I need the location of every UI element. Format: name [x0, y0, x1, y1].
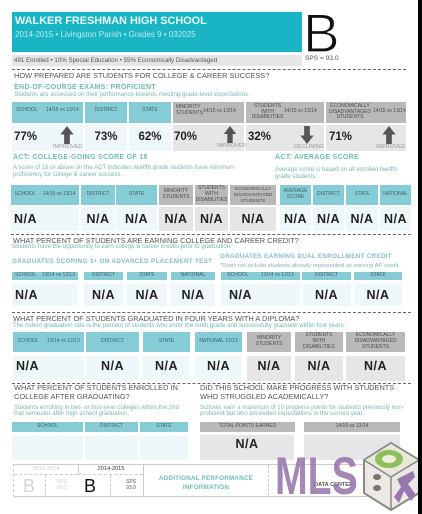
value: dual state [354, 283, 402, 306]
value: district [86, 356, 139, 381]
enrollment band: 491 Enrolled • 10% Special Education • 55% Economically Disadvantaged [14, 57, 217, 64]
value: national [195, 356, 242, 381]
text: graduation description: The cohort graduation rate is the percent of students who enter the ninth grade and successfully graduate within four years. [13, 322, 345, 329]
header: state [143, 332, 190, 352]
header: total points: TOTAL POINTS EARNED [219, 423, 276, 429]
section heading: college enrollment: COLLEGE AFTER GRADUATING? [14, 392, 130, 400]
value: minority [247, 356, 291, 381]
current SPS [110, 475, 143, 496]
value: dual state: N/A [366, 288, 390, 302]
header: economic: DISADVANTAGED [354, 338, 397, 344]
table: progress points [200, 422, 400, 460]
header: disabilities [295, 332, 343, 352]
value: AP district [84, 283, 123, 306]
header: school [11, 185, 79, 205]
text: enrollment description [14, 404, 179, 417]
current grade: B [84, 476, 96, 496]
header: economic: STUDENTS [337, 114, 363, 120]
section heading: progress: DID THIS SCHOOL MAKE PROGRESS WITH STUDENTS [200, 383, 394, 392]
value: total points: N/A [235, 437, 259, 451]
value: average [280, 207, 311, 231]
heading: AP: GRADUATES SCORING 3+ ON ADVANCED PLACEMENT TEST [12, 258, 212, 265]
header: minority [173, 102, 244, 123]
text: ACT college-going description [13, 164, 234, 178]
header: disabilities [246, 102, 324, 123]
value: national: N/A [207, 359, 230, 373]
header: AP district [84, 272, 123, 280]
header: disabilities: WITH [261, 109, 274, 115]
value: minority: 70% [174, 131, 197, 143]
label: disabilities comparison: 14/15 vs 13/14 [284, 108, 317, 114]
value: disabilities [246, 125, 324, 151]
watermark: cube [362, 442, 418, 511]
value: minority [159, 207, 193, 231]
value: state [143, 356, 190, 381]
text: enrollment description: Students enrolling in two- or four-year colleges within the 2nd [14, 404, 179, 411]
label: economic comparison: 14/15 vs 13/14 [373, 108, 406, 114]
header: AP district: DISTRICT [92, 272, 115, 278]
current SPS: 93.0 [126, 485, 136, 491]
header: state: STATE [156, 423, 172, 429]
table: college enrollment [12, 422, 188, 460]
header: dual school: SCHOOL [227, 272, 248, 278]
value: district avg: N/A [317, 212, 340, 226]
text: ACT college-going description: proficiency for college & career success. [13, 170, 122, 178]
header: minority: STUDENTS [176, 110, 203, 116]
value: dual school [221, 283, 300, 306]
header: school [13, 332, 84, 352]
header: comparison [304, 422, 400, 432]
header: minority: MINORITY [164, 188, 188, 194]
value: total points [200, 435, 294, 460]
header: state: STATE [159, 338, 174, 344]
value: dual school: N/A [229, 288, 252, 302]
previous SPS: SPS [57, 479, 67, 485]
header: school: 13/14 vs 12/13 [47, 338, 80, 344]
header: economic [230, 185, 276, 205]
value: economic [230, 207, 276, 231]
header: dual school: 13/14 vs 12/13 [261, 272, 294, 278]
header: disabilities: STUDENTS [306, 332, 332, 338]
value: national [380, 207, 411, 231]
value: minority: N/A [164, 212, 188, 226]
value: minority: N/A [257, 359, 281, 373]
value: state: N/A [155, 359, 178, 373]
value: state [116, 207, 157, 231]
footer: performance strip [13, 464, 405, 497]
cell: state [140, 435, 188, 460]
value: district: N/A [101, 359, 124, 373]
header: school: 14/15 vs 13/14 [43, 191, 75, 197]
value: national: N/A [384, 212, 407, 226]
value: district [85, 125, 127, 151]
header: district [86, 332, 139, 352]
header: minority: MINORITY [176, 104, 200, 110]
value: AP school [12, 283, 78, 306]
header: national [195, 332, 242, 352]
header: disabilities: DISABILITIES [196, 197, 227, 203]
value: AP state: N/A [135, 288, 159, 302]
value: AP school: N/A [15, 288, 38, 302]
header: state: STATE [142, 107, 158, 113]
text: enrollment description: Fall semester after high school graduation. [14, 410, 129, 417]
text: credit description: Students have the opportunity to earn college & career credits prior to graduation [12, 243, 230, 250]
header: district avg: DISTRICT [317, 191, 340, 197]
header: state avg: STATE [354, 191, 370, 197]
header: minority: STUDENTS [163, 194, 189, 200]
header: national [380, 185, 411, 205]
label: minority comparison: 14/15 vs 13/14 [203, 108, 236, 114]
value: economic: 71% [329, 131, 352, 143]
previous grade: B [23, 476, 35, 496]
header: economic: ECONOMICALLY [356, 332, 395, 338]
header: disabilities: DISABILITIES [252, 114, 283, 120]
header: school: SCHOOL [15, 191, 36, 197]
header: state [116, 185, 157, 205]
header: minority [247, 332, 291, 352]
header: disabilities: STUDENTS [254, 103, 281, 109]
header: district [81, 185, 115, 205]
header: district: DISTRICT [94, 107, 118, 113]
additional performance link: ADDITIONAL PERFORMANCE [159, 475, 253, 482]
text: ACT average description: Average score is based on all enrolled twelfth [275, 166, 398, 173]
text: progress description: proficient but who exceeded expectations in the current year. [200, 410, 364, 417]
heading: end of course exams: END-OF-COURSE EXAMS: PROFICIENT [14, 84, 156, 91]
header: district [85, 422, 138, 432]
value: economic: N/A [241, 212, 265, 226]
header: AP national [171, 272, 215, 280]
header: comparison: 14/15 vs 13/14 [336, 423, 368, 429]
previous SPS: 90.1 [57, 485, 67, 491]
cell: district [85, 435, 138, 460]
header: school [12, 102, 83, 123]
table: end of course exams [12, 102, 406, 151]
header: economic [326, 102, 406, 123]
value: school [12, 125, 83, 151]
icon: up arrow school [60, 126, 74, 144]
value: average: N/A [284, 212, 307, 226]
header: AP school: SCHOOL [15, 272, 36, 278]
text: ACT college-going description: A score of 18 or above on the ACT indicates twelfth grade students have minimum [13, 164, 234, 171]
icon: down arrow disabilities [300, 126, 314, 144]
value: district: 73% [94, 131, 118, 143]
text: ACT average description [275, 166, 398, 180]
value: disabilities: N/A [307, 359, 331, 373]
value: district [81, 207, 115, 231]
header: district: DISTRICT [101, 338, 124, 344]
text: exams description: Students are assessed on their performance towards meeting grade-level expectations. [14, 91, 250, 98]
icon: up arrow economic [382, 126, 396, 144]
header: school: 14/15 vs 13/14 [46, 107, 79, 113]
data center link: DATA CENTER [314, 482, 353, 488]
header: dual district [302, 272, 351, 280]
value: district avg [313, 207, 344, 231]
header: disabilities: WITH [313, 338, 325, 344]
header: average [280, 185, 311, 205]
text: ACT average description: grade students. [275, 172, 317, 180]
section heading: progress: WHO STRUGGLED ACADEMICALLY? [200, 392, 328, 400]
value: state avg: N/A [350, 212, 374, 226]
header: AP state [127, 272, 167, 280]
header: AP school [12, 272, 78, 280]
additional performance link: INFORMATION [183, 484, 229, 490]
previous year label [14, 465, 78, 475]
value: disabilities: N/A [200, 212, 223, 226]
header: economic: ECONOMICALLY [235, 186, 271, 191]
header: district: DISTRICT [100, 423, 123, 429]
cell: school [12, 435, 83, 460]
value: school: N/A [16, 359, 39, 373]
header: district [85, 102, 127, 123]
header: state [129, 102, 171, 123]
icon: up arrow minority [224, 126, 236, 143]
heading: dual enrollment: GRADUATES EARNING DUAL ENROLLMENT CREDIT [220, 253, 392, 260]
header: economic: STUDENTS [362, 344, 389, 350]
current year label [78, 465, 143, 475]
label: improved school: IMPROVED [53, 144, 82, 150]
value: minority [173, 125, 244, 151]
black edge bar [418, 0, 422, 514]
header: economic: DISADVANTAGED [234, 192, 272, 197]
value: state: 62% [138, 131, 162, 143]
header: average: SCORE [287, 194, 304, 200]
section heading: college enrollment [14, 383, 178, 400]
table: ACT scores [11, 185, 411, 231]
header: state avg [346, 185, 378, 205]
letter grade: B [303, 2, 340, 64]
value: school: N/A [14, 212, 37, 226]
section heading: readiness: HOW PREPARED ARE STUDENTS FOR COLLEGE & CAREER SUCCESS? [14, 71, 269, 80]
watermark: MLS: MLS [275, 447, 358, 506]
header: total points [200, 422, 295, 432]
header: district avg [313, 185, 344, 205]
header: economic: STUDENTS [241, 198, 265, 203]
header: minority [159, 185, 193, 205]
value: disabilities [195, 207, 228, 231]
header: minority: MINORITY [257, 335, 281, 341]
label: declining: DECLINING [294, 144, 324, 150]
value: AP district: N/A [92, 288, 115, 302]
school name: WALKER FRESHMAN HIGH SCHOOL [15, 15, 207, 27]
header: economic [346, 332, 405, 352]
header: disabilities: DISABILITIES [303, 344, 335, 350]
value: state avg [346, 207, 378, 231]
school details: 2014-2015 • Livingston Parish • Grades 9 • 032025 [15, 30, 196, 39]
heading: ACT college-going: ACT: COLLEGE-GOING SCORE OF 18 [13, 154, 148, 161]
cell: comparison [304, 435, 400, 460]
value: economic: N/A [364, 359, 387, 373]
school header band [12, 12, 302, 52]
value: economic [326, 125, 406, 151]
section heading: college enrollment: WHAT PERCENT OF STUDENTS ENROLLED IN [14, 383, 178, 392]
label: improved economic: IMPROVED [376, 144, 405, 150]
header: dual state: STATE [370, 272, 386, 278]
header: school: SCHOOL [17, 338, 38, 344]
value: AP national: N/A [181, 288, 205, 302]
value: state [129, 125, 171, 151]
header: minority: STUDENTS [256, 341, 282, 347]
section heading: progress [200, 383, 394, 400]
header: national: NATIONAL [383, 191, 408, 197]
value: dual district [302, 283, 351, 306]
header: dual school [221, 272, 300, 280]
header: district: DISTRICT [86, 191, 110, 197]
header: AP national: NATIONAL [181, 272, 205, 278]
value: school: 77% [14, 131, 37, 143]
header: state [140, 422, 188, 432]
section heading: credit: WHAT PERCENT OF STUDENTS ARE EARNING COLLEGE AND CAREER CREDIT? [13, 236, 299, 245]
header: AP school: 13/14 vs 12/13 [42, 272, 75, 278]
section heading: graduation: WHAT PERCENT OF STUDENTS GRADUATED IN FOUR YEARS WITH A DIPLOMA? [13, 314, 299, 323]
table: credit [12, 272, 402, 306]
value: dual district: N/A [315, 288, 338, 302]
label: improved minority: IMPROVED [217, 143, 246, 149]
table: graduation [13, 332, 405, 381]
text: dual enrollment note: *Does not include students already represented as earning AP credit. [220, 263, 400, 269]
header: economic: DISADVANTAGED [329, 109, 371, 115]
header: disabilities: STUDENTS [198, 185, 225, 191]
value: district: N/A [86, 212, 110, 226]
previous SPS [45, 475, 78, 496]
value: AP state [127, 283, 167, 306]
header: school: SCHOOL [16, 107, 37, 113]
header: disabilities: WITH [205, 191, 218, 197]
header: economic: ECONOMICALLY [330, 103, 370, 109]
header: national: NATIONAL 12/13 [199, 338, 238, 344]
value: school [13, 356, 84, 381]
current SPS: SPS [126, 479, 136, 485]
header: dual state [354, 272, 402, 280]
text: progress description [200, 404, 404, 417]
header: dual district: DISTRICT [315, 272, 338, 278]
value: school [11, 207, 79, 231]
value: AP national [171, 283, 215, 306]
value: disabilities: 32% [248, 131, 271, 143]
header: AP state: STATE [139, 272, 155, 278]
SPS score: SPS = 93.0 [305, 55, 339, 62]
header: state: STATE [129, 191, 144, 197]
current year label: 2014-2015 [98, 466, 124, 472]
header: school: SCHOOL [37, 423, 58, 429]
header: average: AVERAGE [284, 188, 307, 194]
previous year label: 2013-2014 [33, 466, 59, 472]
text: progress description: Schools earn a maximum of 10 progress points for students previously non- [200, 404, 404, 411]
value: disabilities [295, 356, 343, 381]
header: disabilities [195, 185, 228, 205]
value: economic [346, 356, 405, 381]
header: school [12, 422, 83, 432]
enrollment band [12, 55, 302, 66]
additional performance link [143, 465, 269, 496]
heading: ACT average: ACT: AVERAGE SCORE [275, 154, 359, 161]
value: state: N/A [125, 212, 148, 226]
